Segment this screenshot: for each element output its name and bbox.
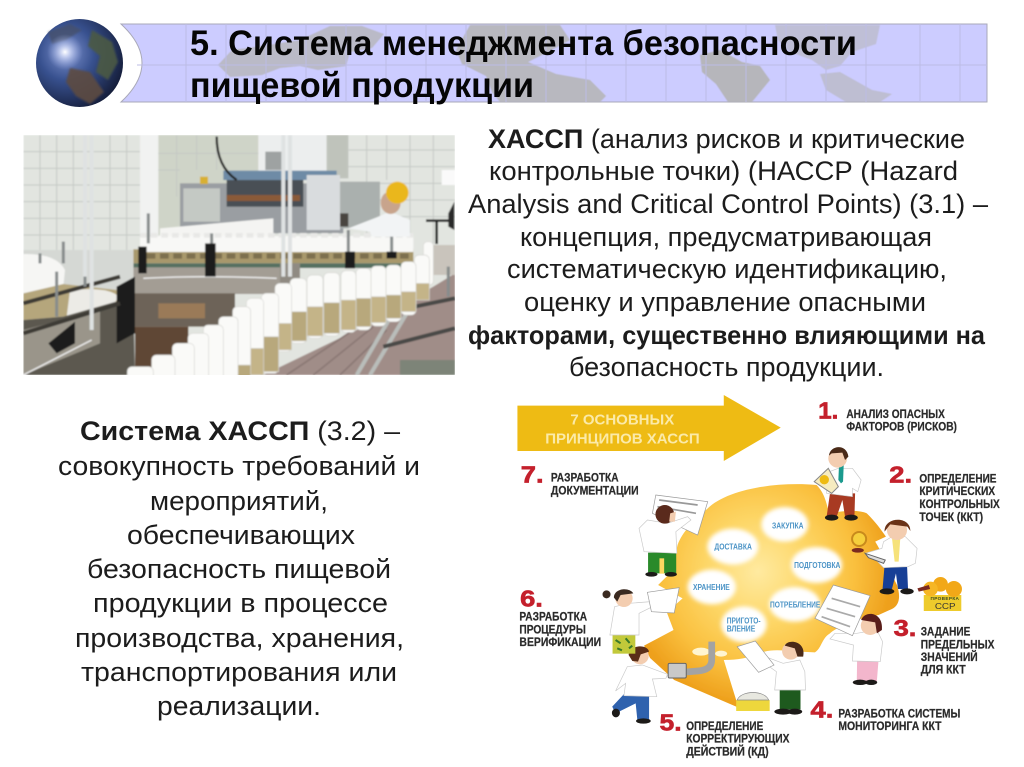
figure: scientist 4 with clipboard <box>736 641 806 715</box>
left conveyor <box>23 250 133 290</box>
icon: CCP box <box>917 577 962 611</box>
step 3: ПРЕДЕЛЬНЫХ <box>921 638 995 651</box>
step 5 <box>659 709 790 758</box>
central yellow blob <box>644 484 899 708</box>
step 1 <box>818 397 957 433</box>
text block: HACCP definition: ХАССП (анализ рисков и критические <box>488 124 965 154</box>
icon: CCP box: CCP <box>935 602 956 611</box>
text block: HACCP system definition: обеспечивающих <box>127 520 356 550</box>
step 4: МОНИТОРИНГА ККТ <box>838 720 942 733</box>
step 6: 6. <box>520 586 543 612</box>
text block: HACCP definition: контрольные точки) (НАССР (Hazard <box>489 156 958 186</box>
step 2: ОПРЕДЕЛЕНИЕ <box>919 473 997 486</box>
step 3: ЗНАЧЕНИЙ <box>921 651 978 664</box>
figure: scientist 2 with magnifier <box>852 520 917 594</box>
machine <box>180 183 343 233</box>
step 7: ДОКУМЕНТАЦИИ <box>551 484 639 497</box>
step 5: КОРРЕКТИРУЮЩИХ <box>686 733 790 746</box>
step 4: 4. <box>811 697 833 723</box>
figure: scientist 1 <box>814 447 861 521</box>
step 5: 5. <box>659 709 682 735</box>
step 2: 2. <box>889 462 912 488</box>
bubble labels <box>693 521 841 634</box>
step 7: 7. <box>521 462 544 488</box>
bubble labels: ЗАКУПКА <box>772 521 804 530</box>
title <box>190 24 857 105</box>
poles <box>38 212 451 318</box>
bubble labels: ВЛЕНИЕ <box>727 625 756 634</box>
back bottles <box>160 218 273 237</box>
step 5: ДЕЙСТВИЙ (КД) <box>686 745 769 758</box>
text block: HACCP system definition: реализации. <box>157 691 321 721</box>
step 2: КРИТИЧЕСКИХ <box>919 485 995 498</box>
infographic: 7 HACCP principles <box>517 395 1000 758</box>
grid <box>137 24 987 102</box>
figure: scientist 5 with pipe valve <box>612 642 727 724</box>
step 6: РАЗРАБОТКА <box>519 611 588 624</box>
step 1: 1. <box>818 397 838 423</box>
step 2: КОНТРОЛЬНЫХ <box>919 498 1000 511</box>
text block: HACCP system definition: Система ХАССП (3.2) – <box>80 416 400 446</box>
step 3: 3. <box>894 615 916 641</box>
text block: HACCP system definition: совокупность требований и <box>58 451 420 481</box>
step 3: ДЛЯ ККТ <box>921 664 966 677</box>
arrow banner: ПРИНЦИПОВ ХАССП <box>545 432 700 448</box>
text block: HACCP system definition: производства, хранения, <box>75 623 404 653</box>
step 2: ТОЧЕК (ККТ) <box>919 511 983 524</box>
text block: HACCP system definition: безопасность пищевой <box>87 554 391 584</box>
step 1: АНАЛИЗ ОПАСНЫХ <box>846 408 945 421</box>
text block: HACCP system definition: мероприятий, <box>150 486 328 516</box>
text block: HACCP system definition: транспортирования или <box>81 657 397 687</box>
world map <box>218 25 892 102</box>
bubble labels: ХРАНЕНИЕ <box>693 583 730 592</box>
figure: scientist 7 with documents <box>639 495 708 577</box>
text block: HACCP definition: безопасность продукции. <box>569 352 884 382</box>
white process bubbles <box>688 507 842 642</box>
text block: HACCP definition: факторами, существенно влияющими на <box>468 320 986 350</box>
text block: HACCP system definition: продукции в процессе <box>93 588 388 618</box>
title: 5. Система менеджмента безопасности <box>190 24 857 63</box>
step 5: ОПРЕДЕЛЕНИЕ <box>686 720 763 733</box>
front bottles <box>127 242 433 380</box>
step 1: ФАКТОРОВ (РИСКОВ) <box>846 420 957 433</box>
step 7 <box>521 462 639 497</box>
text block: HACCP definition: концепция, предусматривающая <box>520 222 932 252</box>
icon: CCP box: ПРОВЕРКА <box>930 596 960 601</box>
header banner <box>121 24 987 102</box>
photo: milk bottling line <box>23 135 455 380</box>
step 3: ЗАДАНИЕ <box>921 626 971 639</box>
step 2 <box>889 462 1000 524</box>
bubble labels: ПОТРЕБЛЕНИЕ <box>770 601 821 610</box>
step 7: РАЗРАБОТКА <box>551 472 619 485</box>
step 6 <box>519 586 601 649</box>
icon: globe <box>36 19 123 107</box>
arrow banner <box>517 395 781 461</box>
bubble labels: ДОСТАВКА <box>714 543 752 552</box>
title: пищевой продукции <box>190 66 534 105</box>
text block: HACCP definition: систематическую идентификацию, <box>507 254 947 284</box>
text block: HACCP definition <box>468 124 988 382</box>
floor <box>263 273 455 375</box>
text block: HACCP system definition <box>58 416 420 721</box>
arrow banner: 7 ОСНОВНЫХ <box>570 412 674 428</box>
step 3 <box>894 615 995 677</box>
text block: HACCP definition: оценку и управление опасными <box>524 287 926 317</box>
woman <box>348 212 410 237</box>
figure: scientist 6 <box>603 588 679 654</box>
step 4 <box>811 697 960 733</box>
step 6: ПРОЦЕДУРЫ <box>519 623 586 636</box>
step 4: РАЗРАБОТКА СИСТЕМЫ <box>838 707 960 720</box>
bubble labels: ПРИГОТО- <box>727 616 761 625</box>
bubble labels: ПОДГОТОВКА <box>794 561 841 570</box>
figure: scientist 3 with papers <box>815 585 883 685</box>
text block: HACCP definition: Analysis and Critical Control Points) (3.1) – <box>468 189 988 219</box>
step 6: ВЕРИФИКАЦИИ <box>519 636 601 649</box>
